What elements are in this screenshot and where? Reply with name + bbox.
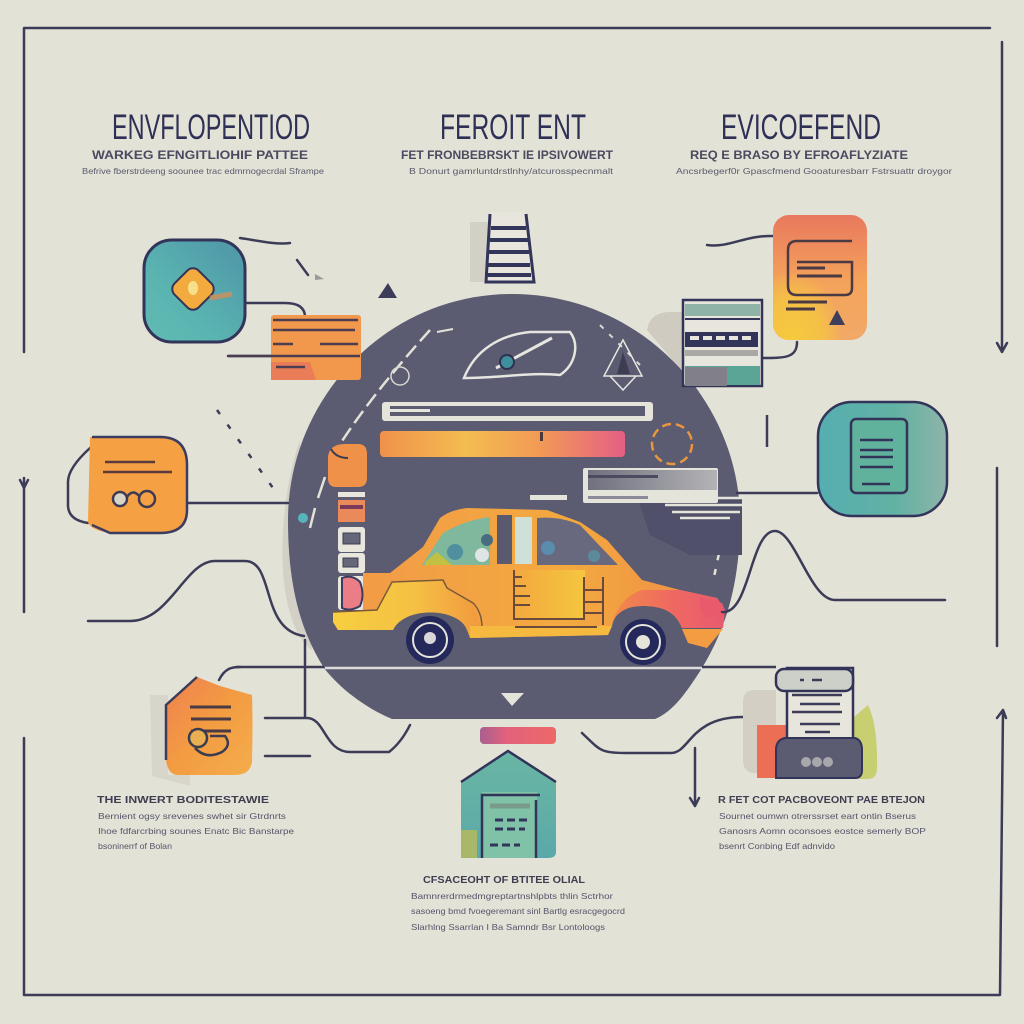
heading: middle column: FEROIT ENT xyxy=(440,108,586,147)
text block: lower left: bsoninerrf of Bolan xyxy=(98,841,172,851)
car xyxy=(333,508,725,665)
icon: teal diamond card xyxy=(144,240,245,342)
icon: orange glasses card left xyxy=(88,437,187,533)
ring icon xyxy=(652,424,692,464)
car yellow front panel xyxy=(333,580,482,630)
text block: lower left: THE INWERT BODITESTAWIE xyxy=(97,794,269,806)
car windows xyxy=(422,515,618,565)
car red hood xyxy=(612,590,725,628)
icon: map shape in circle xyxy=(464,332,575,378)
icon: triangle in circle xyxy=(604,340,642,390)
heading: left column: WARKEG EFNGITLIOHIF PATTEE xyxy=(92,148,308,162)
text block: lower left: Ihoe fdfarcrbing sounes Enatc Bic Banstarpe xyxy=(98,826,294,836)
icon: orange document card top right xyxy=(773,215,867,340)
circle soft shadow xyxy=(282,440,312,650)
circle dashed arc lines xyxy=(310,325,725,577)
text block: lower left: Bernient ogsy srevenes swhet sir Gtrdnrts xyxy=(98,811,286,821)
orange tag left xyxy=(328,444,367,487)
front wheel xyxy=(406,616,454,664)
headlight xyxy=(700,597,725,618)
car yellow panel outline xyxy=(333,580,482,628)
central dark circle xyxy=(288,294,740,719)
icon: house card bottom xyxy=(461,751,556,858)
connector lines xyxy=(68,236,945,806)
text block: lower right: R FET COT PACBOVEONT PAE BTEJON xyxy=(718,794,925,806)
text block: bottom centre: CFSACEOHT OF BTITEE OLIAL xyxy=(423,874,586,886)
text block: lower left xyxy=(97,794,294,851)
text block: lower right xyxy=(718,794,926,851)
heading: right column xyxy=(676,108,952,176)
text block: bottom centre: Slarhlng Ssarrlan I Ba Samndr Bsr Lontoloogs xyxy=(411,922,605,932)
gradient bar xyxy=(380,431,625,457)
icon: top document xyxy=(470,212,534,282)
heading: right column: REQ E BRASO BY EFROAFLYZIATE xyxy=(690,148,908,162)
car door details xyxy=(513,570,603,627)
road line xyxy=(236,667,776,668)
text block: lower right: Ganosrs Aomn oconsoes eostce semerly BOP xyxy=(719,826,926,836)
stacked small tiles xyxy=(338,492,365,610)
icon: teal document card right xyxy=(818,402,947,516)
icon: orange tag lower left xyxy=(150,677,252,786)
small down triangle xyxy=(501,693,524,706)
heading: left column xyxy=(82,108,324,176)
text block: lower right: Sournet oumwn otrerssrset eart ontin Bserus xyxy=(719,811,916,821)
rear wheel xyxy=(620,619,666,665)
car rear section xyxy=(342,577,362,610)
heading: right column: Ancsrbegerf0r Gpascfmend Gooaturesbarr Fstrsuattr droygor xyxy=(676,166,952,176)
table icon backdrop xyxy=(647,312,700,392)
heading: middle column xyxy=(401,108,614,176)
icon: orange list panel xyxy=(228,315,361,380)
heading: middle column: B Donurt gamrluntdrstlnhy/atcurosspecnmalt xyxy=(409,166,614,176)
car lower trim xyxy=(682,629,723,648)
white progress bar xyxy=(382,402,653,421)
heading: right column: EVICOEFEND xyxy=(721,108,881,147)
car body xyxy=(333,508,725,638)
pink bar under circle xyxy=(480,727,556,744)
text block: bottom centre xyxy=(411,874,625,932)
icon: data table card xyxy=(683,300,762,386)
car lower sill xyxy=(470,626,612,638)
text block: bottom centre: sasoeng bmd fvoegeremant sinl Bartlg esracgegocrd xyxy=(411,906,625,916)
heading: left column: ENVFLOPENTIOD xyxy=(112,108,310,147)
text block: bottom centre: Bamnrerdrmedmgreptartnshlpbts thlin Sctrhor xyxy=(411,891,613,901)
heading: middle column: FET FRONBEBRSKT IE IPSIVOWERT xyxy=(401,148,614,162)
text block: lower right: bsenrt Conbing Edf adnvido xyxy=(719,841,835,851)
icon: printer bottom right xyxy=(743,668,877,779)
heading: left column: Befrive fberstrdeeng soounee trac edmrnogecrdal Sframpe xyxy=(82,166,324,176)
white text panel in circle xyxy=(530,468,745,555)
